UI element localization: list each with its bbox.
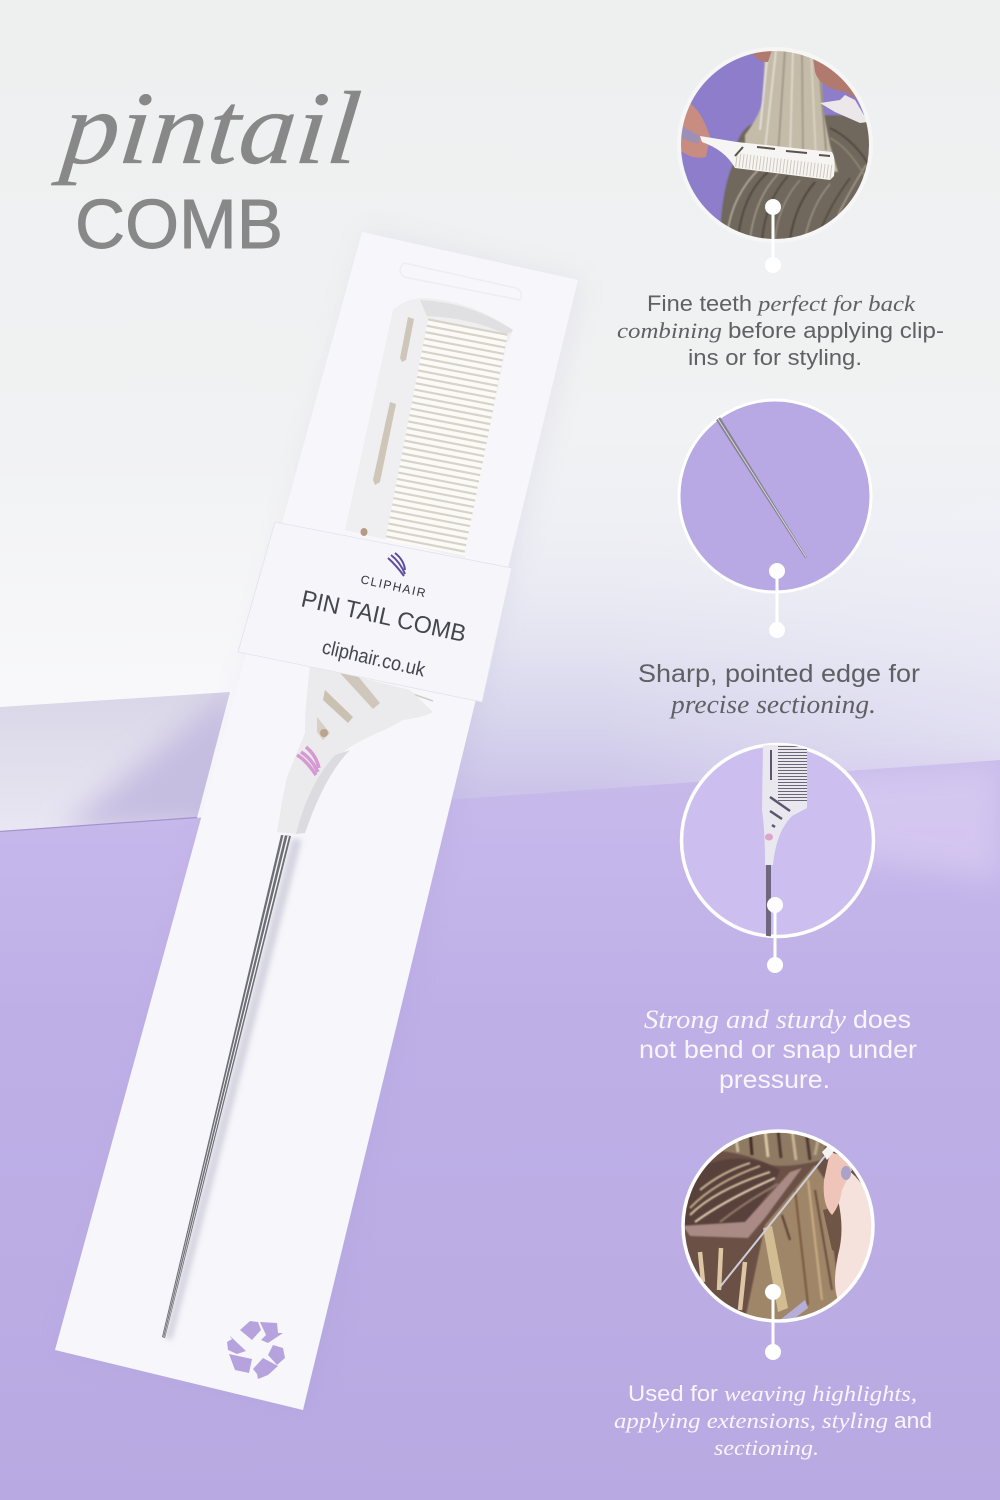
lower right hair xyxy=(745,1165,840,1330)
left hair section xyxy=(684,1159,780,1225)
comb handle xyxy=(277,665,433,834)
caption 1: combining xyxy=(617,318,722,343)
product: comb on packaging card xyxy=(55,232,582,1412)
paper band label: CLIPHAIR xyxy=(359,572,427,600)
caption 3 xyxy=(639,1005,917,1094)
caption 4 xyxy=(614,1381,932,1460)
circle 2: sharp pin tip xyxy=(679,400,871,592)
tool xyxy=(781,1300,808,1320)
steel pin tail xyxy=(162,835,302,1340)
caption 4: weaving highlights, xyxy=(724,1381,917,1406)
scalp parting xyxy=(683,1168,802,1238)
connector 1 xyxy=(765,199,781,273)
caption 4: sectioning. xyxy=(714,1435,819,1460)
caption 1: perfect for back xyxy=(756,291,916,316)
skin: cheek and finger xyxy=(835,1172,872,1298)
caption 2: precise sectioning. xyxy=(669,690,876,719)
brand logo swoosh xyxy=(388,553,405,576)
comb head xyxy=(345,298,515,558)
caption 2 xyxy=(638,660,920,719)
connector 4 xyxy=(765,1284,781,1360)
caption 1 xyxy=(617,291,944,370)
comb teeth xyxy=(425,326,468,548)
dark hair xyxy=(720,114,869,239)
paper band label: cliphair.co.uk xyxy=(320,636,428,682)
title xyxy=(50,70,366,263)
recycling icon xyxy=(227,1321,285,1379)
caption 2: Sharp, pointed edge for xyxy=(638,660,920,688)
comb slots xyxy=(400,317,414,362)
paper band label xyxy=(238,522,512,702)
circle 3: strong comb xyxy=(682,744,874,940)
caption 1: Fine teeth xyxy=(647,291,752,316)
title: COMB xyxy=(75,185,283,263)
circle 1: back combing photo xyxy=(681,51,869,239)
packaging card xyxy=(55,232,578,1410)
connector 3 xyxy=(767,897,783,973)
background: studio wall and purple floor xyxy=(0,600,1000,1500)
left step band xyxy=(0,685,235,835)
extension tips xyxy=(700,1248,745,1310)
hands and foil xyxy=(753,51,858,100)
paper band label: PIN TAIL COMB xyxy=(299,585,469,648)
caption 1: ins or for styling. xyxy=(688,345,862,370)
connector 2 xyxy=(769,563,785,638)
pink swoosh xyxy=(297,747,319,775)
caption 4: Used for xyxy=(628,1381,719,1406)
caption 3: not bend or snap under xyxy=(639,1036,917,1064)
caption 3: Strong and sturdy xyxy=(644,1005,846,1034)
blonde lifted strand xyxy=(745,48,838,172)
hang tab outline xyxy=(400,263,521,300)
caption 4: applying extensions, styling xyxy=(614,1408,888,1433)
caption 3: does xyxy=(853,1006,911,1034)
caption 1: before applying clip- xyxy=(728,318,944,343)
caption 3: pressure. xyxy=(719,1066,830,1094)
card shadow xyxy=(62,232,582,1412)
comb xyxy=(700,136,835,180)
caption 4: and xyxy=(894,1408,932,1433)
top hair band xyxy=(722,1132,826,1166)
dark hair by ear xyxy=(823,1208,834,1251)
title: pintail xyxy=(50,70,366,186)
nail xyxy=(841,1166,851,1180)
circle 4: sectioning photo xyxy=(680,1128,880,1330)
